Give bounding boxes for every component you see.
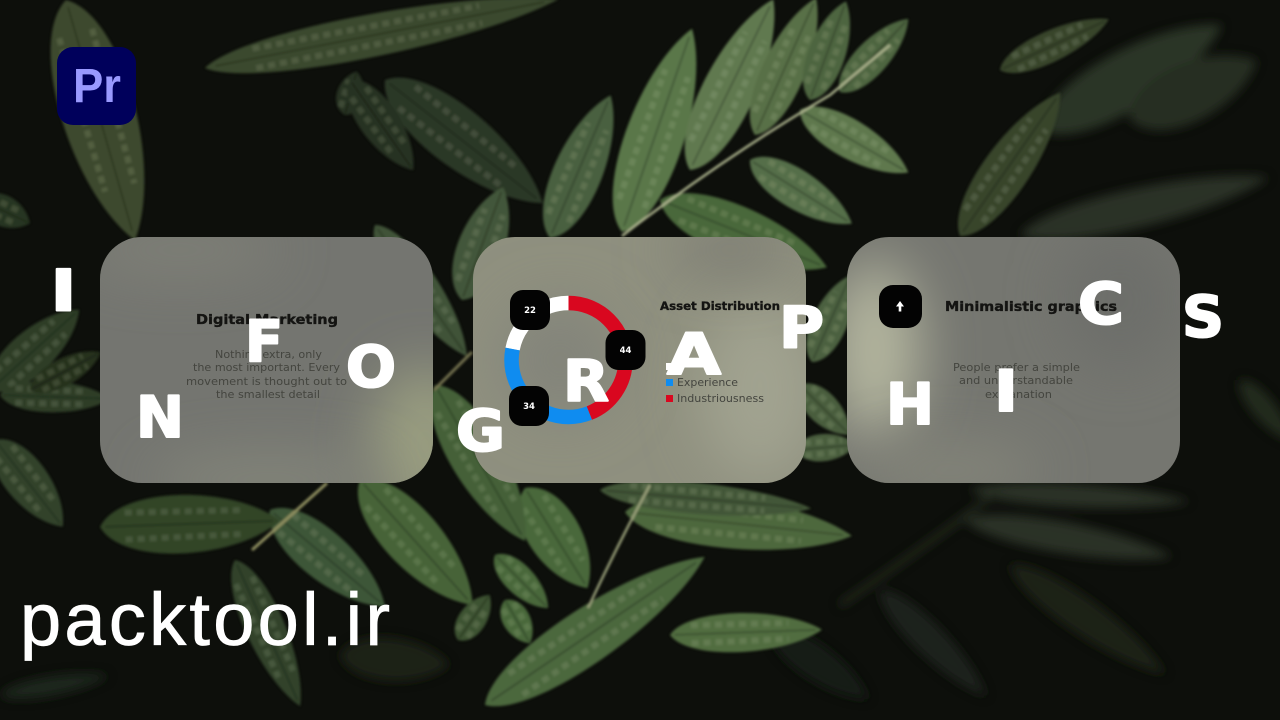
- panel background: asset distribution: [473, 225, 820, 483]
- icon: premiere pro logo: [57, 47, 136, 125]
- title: scattered letters INFOGRAPHICS: C: [1078, 272, 1124, 338]
- text block: digital marketing: movement is thought out to: [186, 376, 347, 388]
- text block: minimalistic graphics: [953, 362, 1080, 401]
- text block: digital marketing: the most important. Every: [193, 362, 340, 374]
- legend: Industriousness: [677, 393, 764, 405]
- badge: 44: 44: [620, 346, 631, 356]
- text block: digital marketing: Nothing extra, only: [215, 349, 322, 361]
- badge: 34: [509, 386, 549, 426]
- title: scattered letters INFOGRAPHICS: P: [779, 296, 824, 362]
- watermark: packtool.ir: packtool.ir: [20, 578, 390, 661]
- text block: minimalistic graphics: and understandable: [959, 375, 1073, 387]
- title: scattered letters INFOGRAPHICS: I: [994, 359, 1018, 425]
- title: scattered letters INFOGRAPHICS: R: [563, 349, 609, 415]
- icon: arrow badge: [879, 285, 922, 328]
- icon: premiere pro logo: Pr: [73, 60, 121, 113]
- badge: 44: [606, 330, 646, 370]
- title: scattered letters INFOGRAPHICS: [50, 258, 1224, 464]
- heading: minimalistic graphics: Minimalistic graphics: [945, 300, 1117, 315]
- title: scattered letters INFOGRAPHICS: F: [245, 309, 283, 375]
- heading: digital marketing: Digital Marketing: [196, 313, 338, 328]
- title: scattered letters INFOGRAPHICS: S: [1182, 284, 1224, 350]
- title: scattered letters INFOGRAPHICS: H: [886, 372, 934, 438]
- panel background: minimalistic graphics: [847, 237, 1180, 483]
- heading: asset distribution: Asset Distribution: [660, 299, 780, 313]
- text block: digital marketing: the smallest detail: [216, 389, 320, 401]
- title: scattered letters INFOGRAPHICS: I: [50, 258, 76, 324]
- title: scattered letters INFOGRAPHICS: A: [667, 322, 721, 388]
- panel: digital marketing: [100, 237, 433, 483]
- title: scattered letters INFOGRAPHICS: N: [136, 385, 184, 451]
- panel: asset distribution: [473, 225, 820, 483]
- legend: Experience: [677, 377, 738, 389]
- text block: minimalistic graphics: explanation: [985, 389, 1052, 401]
- title: scattered letters INFOGRAPHICS: G: [456, 398, 505, 464]
- donut chart: [512, 303, 626, 417]
- panel background: digital marketing: [100, 237, 433, 483]
- badge: 22: [510, 290, 550, 330]
- text block: minimalistic graphics: People prefer a simple: [953, 362, 1080, 374]
- legend: [666, 363, 764, 405]
- left side and mid-gap leaves: [0, 186, 867, 540]
- title: scattered letters INFOGRAPHICS: O: [346, 334, 396, 400]
- text block: digital marketing: [186, 349, 347, 401]
- badge: 22: 22: [524, 306, 536, 316]
- lower fern frond: [99, 352, 854, 720]
- badge: 34: 34: [523, 402, 535, 412]
- panel: minimalistic graphics: [847, 237, 1180, 483]
